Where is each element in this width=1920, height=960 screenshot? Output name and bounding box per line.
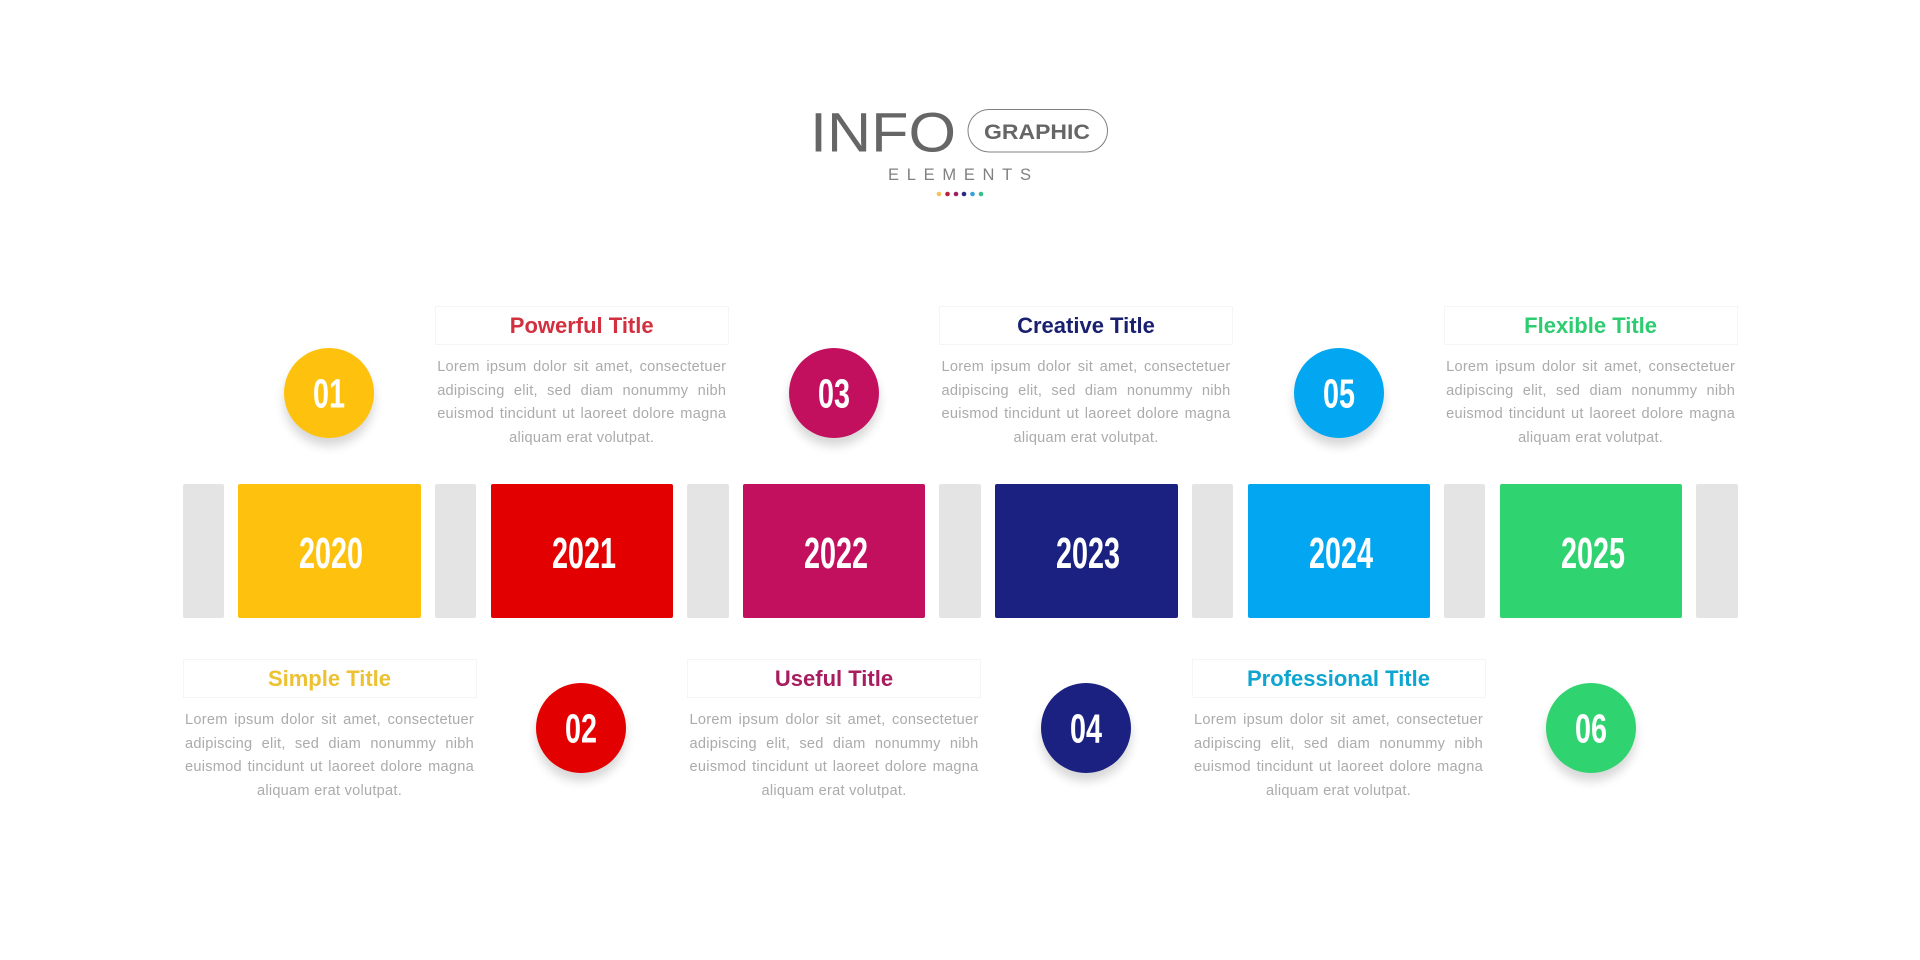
body text: Lorem ipsum dolor sit amet, consectetuer: [942, 359, 1230, 375]
body text: aliquam erat volutpat.: [761, 783, 907, 799]
year block: 2020: [238, 484, 420, 618]
body text: aliquam erat volutpat.: [257, 783, 402, 799]
circle badge 02: [536, 683, 626, 773]
body text: Lorem ipsum dolor sit amet, consectetuer: [185, 712, 474, 728]
panel: Simple Title: [183, 659, 477, 799]
year block: 2024: [1248, 484, 1430, 618]
body text: Lorem ipsum dolor sit amet, consectetuer: [1194, 712, 1483, 728]
heading: [1192, 659, 1486, 698]
heading: Flexible Title: [1524, 313, 1657, 338]
timeline band: [183, 484, 1738, 618]
body text: aliquam erat volutpat.: [1266, 783, 1411, 799]
body text: euismod tincidunt ut laoreet dolore magna: [437, 406, 726, 422]
circle badge 01: [284, 348, 374, 438]
body text: adipiscing elit, sed diam nonummy nibh: [690, 736, 978, 752]
heading: Simple Title: [268, 666, 391, 691]
subtitle: ELEMENTS: ELEMENTS: [888, 166, 1031, 184]
body text: euismod tincidunt ut laoreet dolore magna: [1194, 759, 1483, 775]
circle badge 06: 06: [1574, 706, 1606, 752]
body text: adipiscing elit, sed diam nonummy nibh: [437, 383, 726, 399]
heading: [1444, 306, 1738, 345]
panel: Creative Title: [939, 306, 1233, 446]
circle badge 04: 04: [1070, 706, 1102, 752]
pill: GRAPHIC: [968, 110, 1108, 152]
body text: [690, 712, 978, 799]
body text: euismod tincidunt ut laoreet dolore magna: [690, 759, 978, 775]
year block: 2025: 2025: [1561, 529, 1625, 578]
year block: 2023: [995, 484, 1178, 618]
body text: [437, 359, 726, 446]
body text: euismod tincidunt ut laoreet dolore magna: [1446, 406, 1735, 422]
year block: 2021: 2021: [552, 529, 616, 578]
body text: [942, 359, 1230, 446]
heading: Useful Title: [775, 666, 893, 691]
year block: 2020: 2020: [299, 529, 363, 578]
year block: 2021: [490, 484, 673, 618]
circle badge 03: 03: [818, 370, 850, 416]
body text: aliquam erat volutpat.: [1013, 430, 1159, 446]
title: INFO: INFO: [810, 100, 956, 164]
circle badge 02: 02: [565, 706, 597, 752]
circle badge 04: [1041, 683, 1131, 773]
body text: adipiscing elit, sed diam nonummy nibh: [185, 736, 474, 752]
decorative colour dots: [937, 192, 983, 196]
header logo: [810, 100, 1108, 196]
heading: [687, 659, 981, 698]
body text: Lorem ipsum dolor sit amet, consectetuer: [437, 359, 726, 375]
panel: Powerful Title: [435, 306, 729, 446]
body text: aliquam erat volutpat.: [509, 430, 654, 446]
heading: [182, 659, 476, 698]
heading: Powerful Title: [510, 313, 654, 338]
circle badge 05: [1294, 348, 1384, 438]
separator bars: [183, 484, 1738, 618]
body text: adipiscing elit, sed diam nonummy nibh: [942, 383, 1230, 399]
year block: 2025: [1500, 484, 1682, 618]
body text: adipiscing elit, sed diam nonummy nibh: [1446, 383, 1735, 399]
body text: aliquam erat volutpat.: [1518, 430, 1663, 446]
heading: Professional Title: [1247, 666, 1430, 691]
body text: euismod tincidunt ut laoreet dolore magna: [942, 406, 1230, 422]
body text: euismod tincidunt ut laoreet dolore magna: [185, 759, 474, 775]
body text: Lorem ipsum dolor sit amet, consectetuer: [1446, 359, 1735, 375]
heading: [435, 306, 729, 345]
circle badge 01: 01: [313, 370, 345, 416]
body text: Lorem ipsum dolor sit amet, consectetuer: [690, 712, 978, 728]
circle badge 05: 05: [1322, 370, 1354, 416]
year block: 2022: 2022: [804, 529, 868, 578]
pill: GRAPHIC: GRAPHIC: [984, 120, 1090, 144]
year block: 2022: [742, 484, 925, 618]
body text: adipiscing elit, sed diam nonummy nibh: [1194, 736, 1483, 752]
panel: Flexible Title: [1444, 306, 1738, 446]
heading: Creative Title: [1017, 313, 1155, 338]
year block: 2023: 2023: [1056, 529, 1120, 578]
circle badge 06: [1546, 683, 1636, 773]
body text: [1194, 712, 1483, 799]
year block: 2024: 2024: [1308, 529, 1373, 578]
heading: [939, 306, 1233, 345]
body text: [1446, 359, 1735, 446]
circle badge 03: [789, 348, 879, 438]
panel: Professional Title: [1192, 659, 1486, 799]
body text: [185, 712, 474, 799]
panel: Useful Title: [687, 659, 981, 799]
